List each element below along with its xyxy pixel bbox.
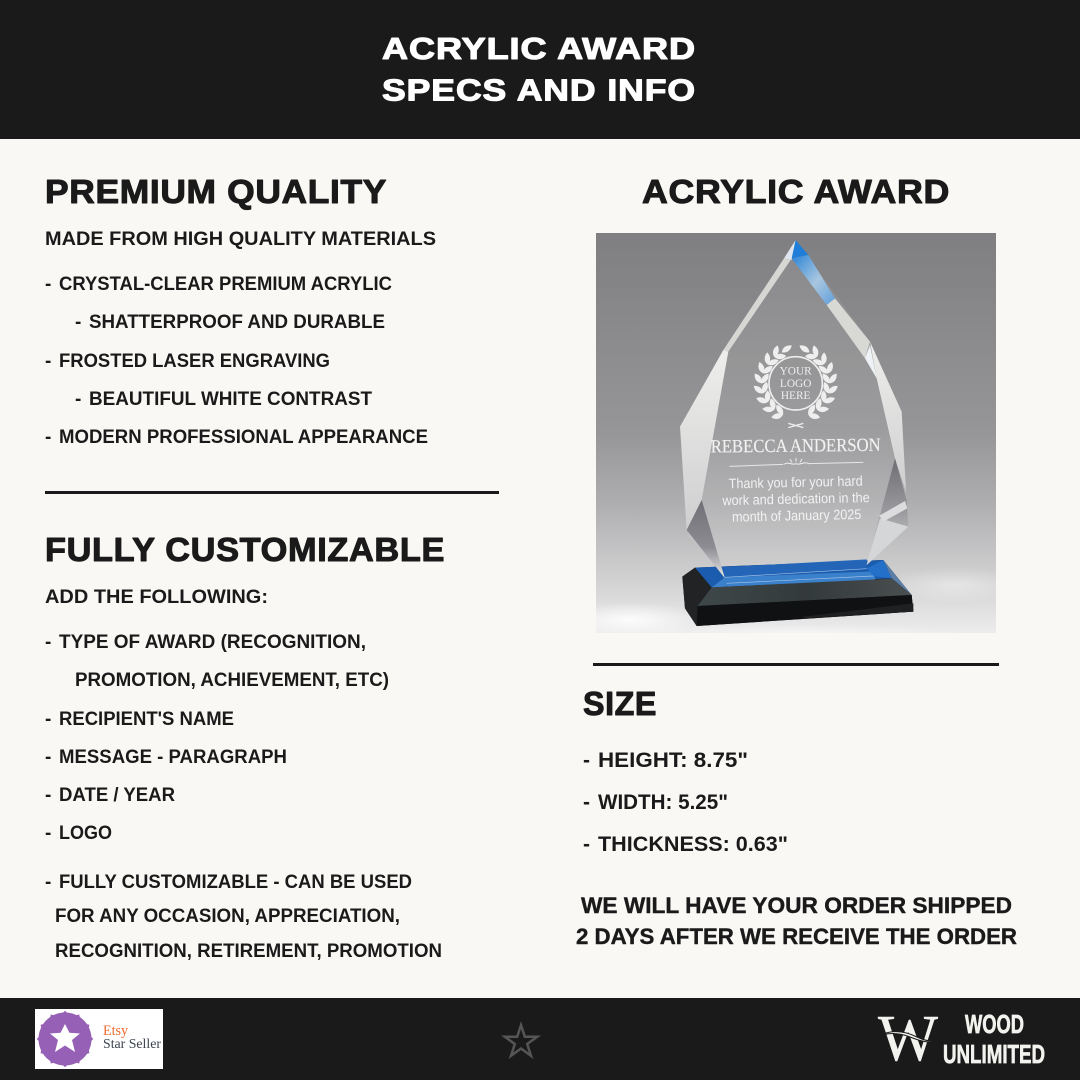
- logo: wood unlimited: [878, 1002, 1045, 1075]
- text block: customization list: RECOGNITION, RETIREMENT, PROMOTION: [55, 941, 442, 962]
- text block: dimensions: THICKNESS: 0.63": [598, 833, 788, 856]
- text block: customization list: PROMOTION, ACHIEVEMENT, ETC): [75, 670, 389, 691]
- badge: etsy star seller: [35, 1009, 163, 1069]
- footer band: [0, 998, 1080, 1080]
- icon: purple star badge: [37, 1011, 93, 1067]
- icon: star outline: [505, 1025, 537, 1056]
- engraved logo text: LOGO: [780, 378, 811, 390]
- heading: acrylic award: ACRYLIC AWARD: [642, 173, 950, 210]
- text block: premium quality list: SHATTERPROOF AND DURABLE: [89, 312, 385, 333]
- heading: premium quality: PREMIUM QUALITY: [45, 173, 387, 210]
- black and blue base: [682, 559, 913, 626]
- text block: dimensions: HEIGHT: 8.75": [598, 749, 748, 772]
- text block: customization list: FOR ANY OCCASION, APPRECIATION,: [55, 906, 400, 927]
- text block: premium quality list: BEAUTIFUL WHITE CONTRAST: [89, 389, 372, 410]
- text block: dimensions: [583, 749, 788, 856]
- text block: shipping note: WE WILL HAVE YOUR ORDER SHIPPED: [581, 893, 1012, 918]
- text block: premium quality list: FROSTED LASER ENGRAVING: [59, 351, 330, 372]
- text block: customization list: ADD THE FOLLOWING:: [45, 587, 268, 608]
- text block: customization list: -: [45, 785, 51, 806]
- heading: fully customizable: FULLY CUSTOMIZABLE: [45, 531, 445, 568]
- text block: customization list: MESSAGE - PARAGRAPH: [59, 747, 287, 768]
- text block: customization list: LOGO: [59, 823, 112, 844]
- text block: premium quality list: MADE FROM HIGH QUALITY MATERIALS: [45, 229, 436, 250]
- text block: premium quality list: [45, 229, 436, 448]
- text block: customization list: RECIPIENT'S NAME: [59, 709, 234, 730]
- text block: premium quality list: -: [75, 312, 81, 333]
- engraved logo text: YOUR: [780, 365, 812, 377]
- panel: premium quality: [45, 173, 436, 448]
- text block: customization list: -: [45, 747, 51, 768]
- engraved message: Thank you for your hard: [729, 473, 863, 491]
- photo: acrylic award: [596, 233, 996, 633]
- text block: customization list: DATE / YEAR: [59, 785, 175, 806]
- bevel facets: [723, 258, 791, 352]
- text block: dimensions: WIDTH: 5.25": [598, 791, 728, 814]
- text block: premium quality list: -: [75, 389, 81, 410]
- text block: premium quality list: -: [45, 427, 51, 448]
- text block: customization list: FULLY CUSTOMIZABLE - CAN BE USED: [59, 872, 412, 893]
- text block: customization list: [45, 587, 442, 962]
- engraved flourish: [729, 458, 863, 466]
- panel: fully customizable: [45, 531, 445, 962]
- text block: premium quality list: CRYSTAL-CLEAR PREMIUM ACRYLIC: [59, 274, 392, 295]
- logo: wood unlimited: WOOD: [965, 1009, 1024, 1039]
- logo: wood unlimited: W: [878, 1002, 939, 1075]
- heading: size: SIZE: [583, 685, 657, 722]
- text block: shipping note: 2 DAYS AFTER WE RECEIVE THE ORDER: [576, 924, 1017, 949]
- text block: shipping note: [576, 893, 1017, 949]
- text block: dimensions: -: [583, 749, 590, 772]
- text block: customization list: TYPE OF AWARD (RECOGNITION,: [59, 632, 366, 653]
- text block: customization list: -: [45, 709, 51, 730]
- engraved message: [722, 476, 870, 523]
- title: [382, 31, 696, 108]
- text block: premium quality list: -: [45, 274, 51, 295]
- text block: dimensions: -: [583, 791, 590, 814]
- engraved logo text: HERE: [781, 390, 811, 402]
- title: SPECS AND INFO: [382, 72, 696, 108]
- engraved message: work and dedication in the: [721, 489, 870, 508]
- badge label: Etsy: [103, 1023, 128, 1039]
- header band: [0, 0, 1080, 139]
- acrylic body: [726, 560, 866, 566]
- engraved name: REBECCA ANDERSON: [711, 435, 881, 458]
- panel: size: [583, 685, 788, 856]
- text block: customization list: -: [45, 823, 51, 844]
- badge label: [103, 1023, 161, 1052]
- engraved logo wreath: [752, 343, 839, 428]
- engraved logo text: [780, 367, 812, 399]
- title: ACRYLIC AWARD: [382, 31, 696, 66]
- text block: premium quality list: MODERN PROFESSIONAL APPEARANCE: [59, 427, 428, 448]
- text block: customization list: -: [45, 872, 51, 893]
- badge label: Star Seller: [103, 1037, 161, 1052]
- text block: customization list: -: [45, 632, 51, 653]
- text block: dimensions: -: [583, 833, 590, 856]
- engraved message: month of January 2025: [732, 506, 862, 525]
- text block: premium quality list: -: [45, 351, 51, 372]
